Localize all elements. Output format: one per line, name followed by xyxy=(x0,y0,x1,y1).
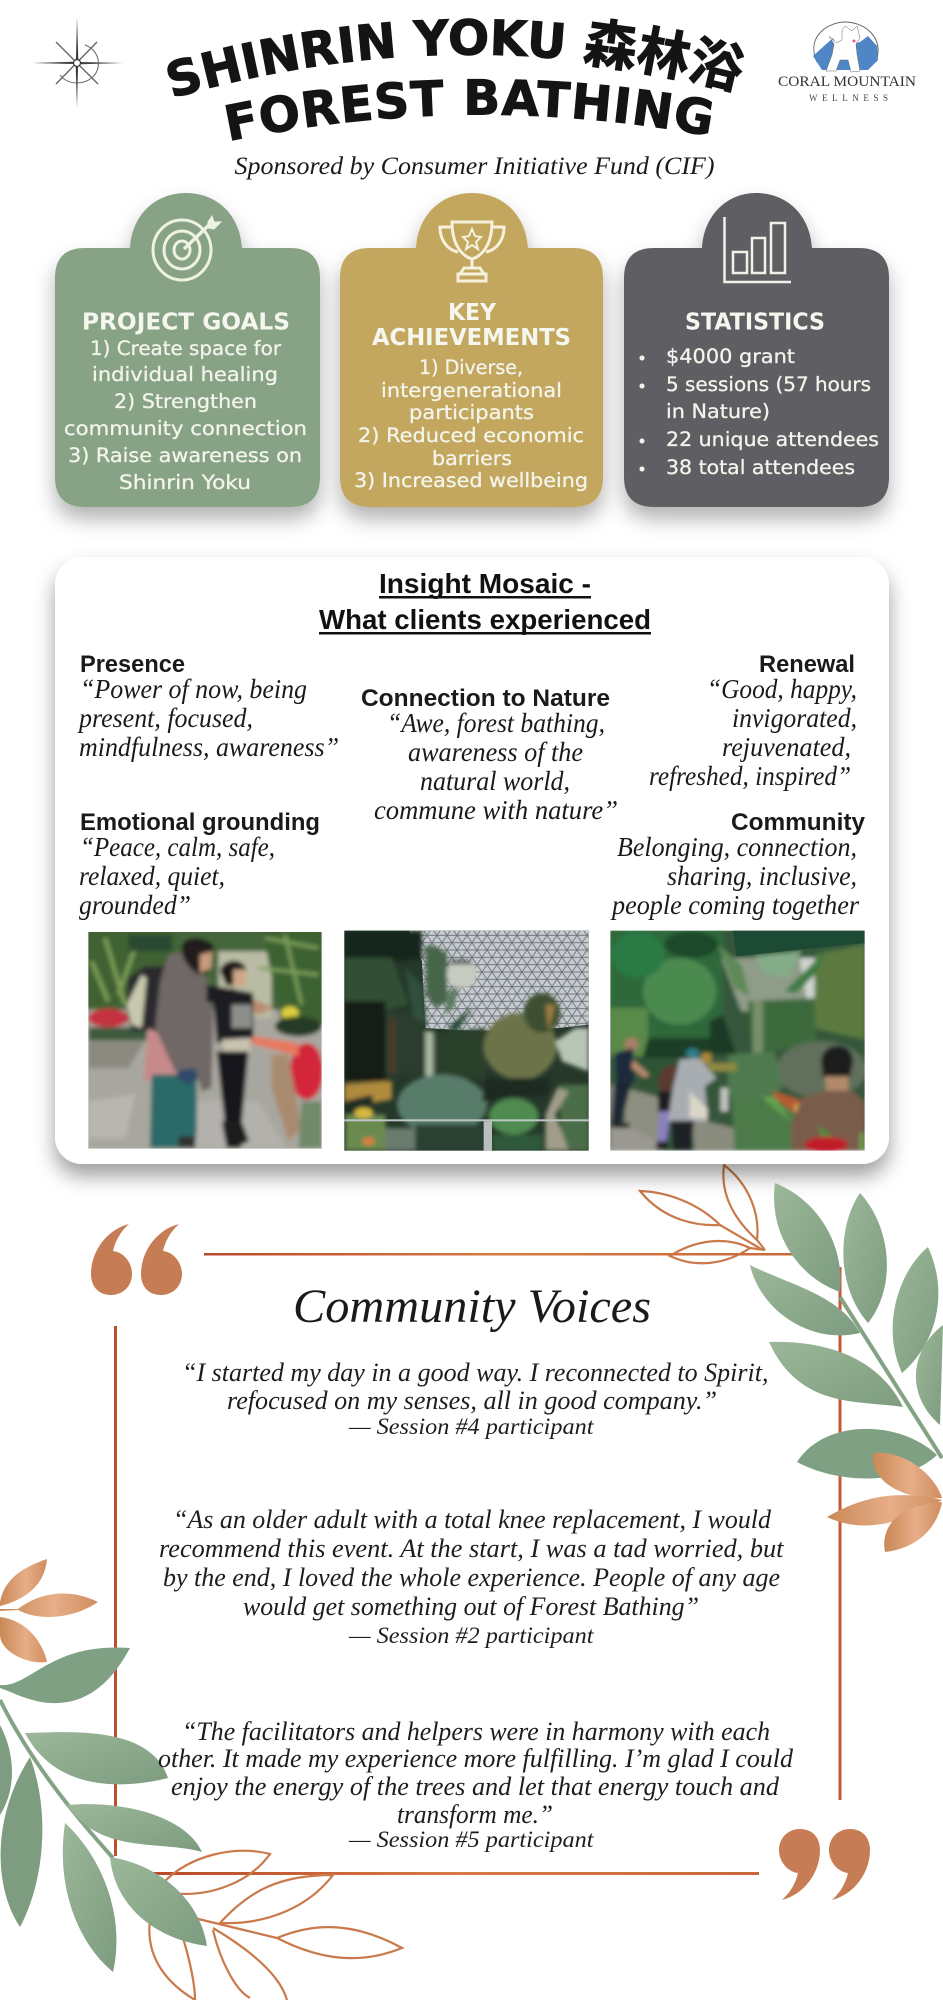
photo: woman and child pointing in garden xyxy=(85,928,325,1151)
text: achievements list: 1) Diverse, xyxy=(419,356,523,379)
heading: community voices: Community Voices xyxy=(293,1280,651,1333)
quote: session 5: “The facilitators and helpers were in harmony with each xyxy=(182,1716,770,1746)
text: statistics list: 5 sessions (57 hours xyxy=(666,373,871,396)
text: connection to nature: Connection to Nature xyxy=(361,685,610,712)
title: curved heading xyxy=(167,18,744,141)
text: achievements list: 3) Increased wellbeing xyxy=(354,469,588,492)
text: community: Belonging, connection, xyxy=(617,832,857,862)
text: presence xyxy=(77,651,339,762)
quote: session 5 xyxy=(158,1716,794,1853)
heading: key achievements: ACHIEVEMENTS xyxy=(372,325,571,351)
text: statistics list: 22 unique attendees xyxy=(666,428,879,451)
icon: closing quotation mark xyxy=(779,1829,870,1900)
text: achievements list: intergenerational xyxy=(381,379,562,402)
logo: Coral Mountain Wellness: WELLNESS xyxy=(809,93,888,103)
text: connection to nature: natural world, xyxy=(420,766,570,796)
text: emotional grounding xyxy=(79,809,320,920)
quote: session 4: “I started my day in a good way. I reconnected to Spirit, xyxy=(182,1357,768,1387)
text: presence: present, focused, xyxy=(77,703,253,733)
text: community: people coming together xyxy=(610,890,859,920)
decoration: copper outline leaves top right xyxy=(640,1165,765,1263)
photo: conservatory dome interior xyxy=(342,928,592,1151)
text: goals list: individual healing xyxy=(92,363,278,386)
heading: insight mosaic: Insight Mosaic - xyxy=(379,568,591,599)
text: renewal: “Good, happy, xyxy=(707,674,857,704)
text: statistics list: in Nature) xyxy=(666,400,770,423)
text: renewal: refreshed, inspired” xyxy=(649,761,851,791)
panel: statistics xyxy=(624,193,889,507)
text: statistics list xyxy=(640,345,879,479)
quote: session 2: by the end, I loved the whole experience. People of any age xyxy=(163,1562,780,1592)
text: connection to nature: commune with nature” xyxy=(374,795,618,825)
quote: session 2 xyxy=(159,1504,784,1649)
text: goals list: community connection xyxy=(64,417,307,440)
text: renewal: invigorated, xyxy=(732,703,857,733)
text: goals list: 3) Raise awareness on xyxy=(68,444,302,467)
icon: bar chart xyxy=(724,217,791,282)
text: emotional grounding: grounded” xyxy=(79,890,191,920)
text: achievements list: 2) Reduced economic xyxy=(358,424,584,447)
text: presence: Presence xyxy=(80,651,185,678)
decoration: copper leaves left xyxy=(0,1559,98,1662)
panel: key achievements xyxy=(340,193,603,507)
quote: session 4: — Session #4 participant xyxy=(348,1414,594,1440)
quote: session 2: — Session #2 participant xyxy=(348,1623,594,1649)
quote: session 4 xyxy=(182,1357,768,1440)
text: community xyxy=(610,809,865,920)
quote: session 5: enjoy the energy of the trees and let that energy touch and xyxy=(171,1771,780,1801)
quote: session 2: would get something out of Forest Bathing” xyxy=(243,1591,699,1621)
panel: insight mosaic xyxy=(55,557,889,1164)
title line 2: FOREST BATHING xyxy=(225,78,712,141)
logo: Coral Mountain Wellness xyxy=(778,22,916,103)
frame: copper border lines xyxy=(114,1253,842,1875)
heading: project goals: PROJECT GOALS xyxy=(82,310,290,336)
text: goals list: 1) Create space for xyxy=(90,337,282,360)
logo: Coral Mountain Wellness: CORAL MOUNTAIN xyxy=(778,74,916,90)
quote: session 4: refocused on my senses, all in good company.” xyxy=(227,1385,717,1415)
text: achievements list xyxy=(354,356,588,492)
text: presence: mindfulness, awareness” xyxy=(79,732,339,762)
text: connection to nature xyxy=(361,685,618,825)
heading: key achievements: KEY xyxy=(448,300,496,326)
text: emotional grounding: Emotional grounding xyxy=(80,809,320,836)
text: community: sharing, inclusive, xyxy=(667,861,857,891)
heading: insight mosaic: What clients experienced xyxy=(319,604,651,635)
text: goals list xyxy=(64,337,307,494)
subtitle: Sponsored by Consumer Initiative Fund (CIF) xyxy=(234,151,714,180)
quote: session 5: — Session #5 participant xyxy=(348,1827,594,1853)
text: achievements list: participants xyxy=(409,401,534,424)
decoration: copper leaves right xyxy=(827,1453,942,1552)
panel: project goals xyxy=(55,193,320,507)
text: community: Community xyxy=(731,809,865,836)
text: achievements list: barriers xyxy=(432,447,512,470)
text: emotional grounding: “Peace, calm, safe, xyxy=(80,832,275,862)
decoration: green branch right xyxy=(750,1183,943,1478)
text: presence: “Power of now, being xyxy=(80,674,307,704)
quote: session 5: other. It made my experience more fulfilling. I’m glad I could xyxy=(158,1743,794,1773)
text: renewal: Renewal xyxy=(759,651,855,678)
quote: session 2: “As an older adult with a total knee replacement, I would xyxy=(173,1504,772,1534)
icon: trophy xyxy=(440,222,504,281)
heading: key achievements xyxy=(372,300,571,351)
text: connection to nature: awareness of the xyxy=(408,737,583,767)
photo: visitors viewing plants xyxy=(608,928,868,1153)
heading: statistics: STATISTICS xyxy=(685,310,825,336)
title line 1: SHINRIN YOKU 森林浴 xyxy=(167,18,744,96)
heading: insight mosaic xyxy=(319,568,651,635)
icon: target xyxy=(153,216,221,280)
text: emotional grounding: relaxed, quiet, xyxy=(79,861,225,891)
icon: compass star xyxy=(32,17,123,108)
text: goals list: Shinrin Yoku xyxy=(119,471,251,494)
text: renewal: rejuvenated, xyxy=(722,732,851,762)
text: statistics list: 38 total attendees xyxy=(666,456,855,479)
text: connection to nature: “Awe, forest bathing, xyxy=(387,708,605,738)
text: statistics list: $4000 grant xyxy=(666,345,795,368)
quote: session 5: transform me.” xyxy=(397,1799,553,1829)
quote: session 2: recommend this event. At the start, I was a tad worried, but xyxy=(159,1533,784,1563)
text: renewal xyxy=(649,651,857,791)
text: goals list: 2) Strengthen xyxy=(114,390,257,413)
decoration: green branch left xyxy=(0,1647,207,1972)
decoration: copper outline leaves bottom xyxy=(149,1851,402,2000)
icon: opening quotation mark xyxy=(91,1224,182,1295)
